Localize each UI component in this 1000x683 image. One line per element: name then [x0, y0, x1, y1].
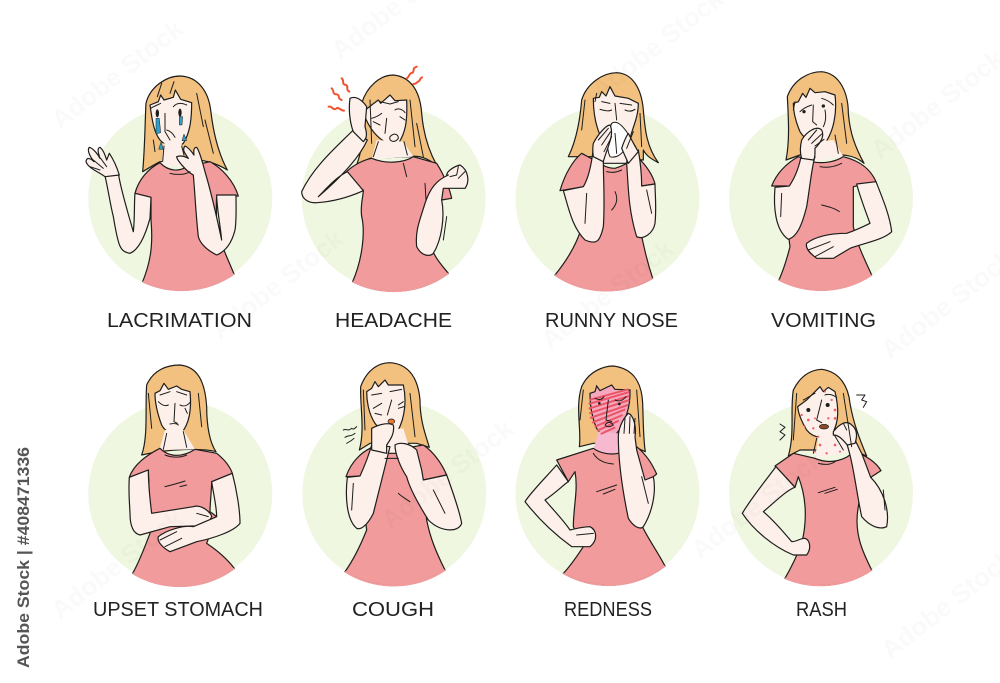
background circle	[302, 401, 486, 585]
label: LACRIMATION	[107, 310, 252, 332]
panel: runny nose	[516, 73, 700, 332]
panel: rash	[729, 369, 913, 621]
figure: crying woman	[86, 76, 238, 290]
label: HEADACHE	[335, 310, 452, 332]
panel: headache	[302, 67, 486, 332]
figure: woman holding head	[302, 67, 468, 291]
label: COUGH	[352, 599, 434, 621]
figure: woman with tissue	[555, 73, 658, 291]
watermark: Adobe Stock	[45, 503, 189, 625]
label: UPSET STOMACH	[93, 599, 263, 621]
label: VOMITING	[771, 310, 876, 332]
background circle	[729, 106, 913, 290]
stock id text: Adobe Stock | #408471336	[14, 447, 33, 668]
background circle	[516, 401, 700, 585]
panel: lacrimation	[86, 76, 272, 332]
background circle	[302, 106, 486, 290]
label: RUNNY NOSE	[545, 310, 678, 332]
panel: cough	[302, 363, 486, 621]
watermark: Adobe Stock	[375, 413, 519, 535]
figure: woman with red face	[525, 366, 665, 585]
panel: upset stomach	[88, 365, 272, 621]
background circle	[88, 106, 272, 290]
watermark: Adobe Stock	[45, 13, 189, 135]
background circle	[88, 401, 272, 585]
figure: woman with rash	[742, 369, 888, 585]
background circle	[516, 106, 700, 290]
watermark: Adobe Stock	[685, 443, 829, 565]
panel: vomiting	[729, 72, 913, 332]
figure: woman holding stomach	[129, 365, 240, 586]
figure: woman covering mouth	[772, 72, 892, 290]
background circle	[729, 401, 913, 585]
label: REDNESS	[564, 599, 652, 621]
figure: woman coughing	[343, 363, 462, 586]
panel: redness	[516, 366, 700, 621]
watermark: Adobe Stock	[205, 223, 349, 345]
watermark: Adobe Stock	[535, 233, 679, 355]
label: RASH	[796, 599, 847, 621]
